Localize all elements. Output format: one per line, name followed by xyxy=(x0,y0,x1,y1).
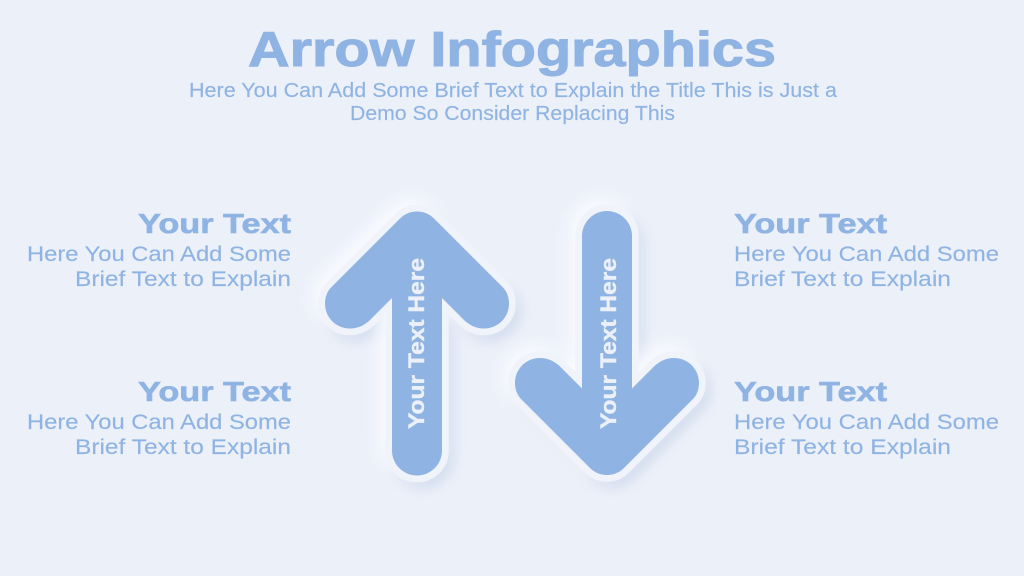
arrow label: down: Your Text Here xyxy=(596,258,621,429)
arrow: down xyxy=(509,205,704,481)
text block: bottom left: Here You Can Add Some xyxy=(27,411,291,434)
text block: top right: Brief Text to Explain xyxy=(734,268,951,291)
text block: top left: Brief Text to Explain xyxy=(75,268,291,291)
text block: bottom left: Your Text xyxy=(138,376,291,407)
subtitle xyxy=(189,80,838,125)
text block: top right xyxy=(734,208,999,291)
title: Arrow Infographics xyxy=(248,23,776,77)
text block: bottom right: Your Text xyxy=(734,376,887,407)
text block: top left: Here You Can Add Some xyxy=(27,243,291,266)
text block: bottom left: Brief Text to Explain xyxy=(75,436,291,459)
text block: bottom left xyxy=(27,376,291,459)
arrow label: up: Your Text Here xyxy=(404,258,429,429)
text block: top left: Your Text xyxy=(138,208,291,239)
text block: bottom right xyxy=(734,376,999,459)
subtitle: Demo So Consider Replacing This xyxy=(350,103,675,125)
text block: bottom right: Here You Can Add Some xyxy=(734,411,999,434)
text block: top left xyxy=(27,208,291,291)
arrow: up xyxy=(319,206,514,482)
text block: top right: Here You Can Add Some xyxy=(734,243,999,266)
text block: bottom right: Brief Text to Explain xyxy=(734,436,951,459)
text block: top right: Your Text xyxy=(734,208,887,239)
subtitle: Here You Can Add Some Brief Text to Explain the Title This is Just a xyxy=(189,80,838,102)
